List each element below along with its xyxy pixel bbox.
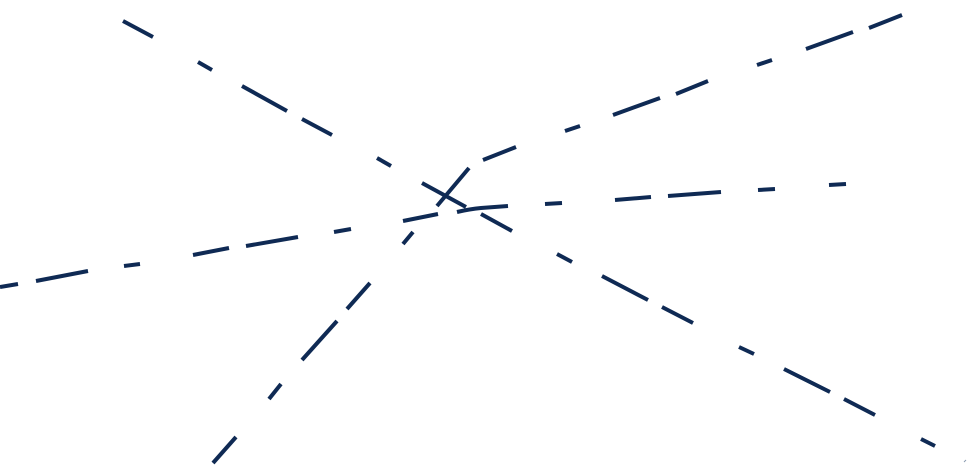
dashed line: left to right [0,184,846,287]
dashed line: upper right to lower left [213,15,902,463]
